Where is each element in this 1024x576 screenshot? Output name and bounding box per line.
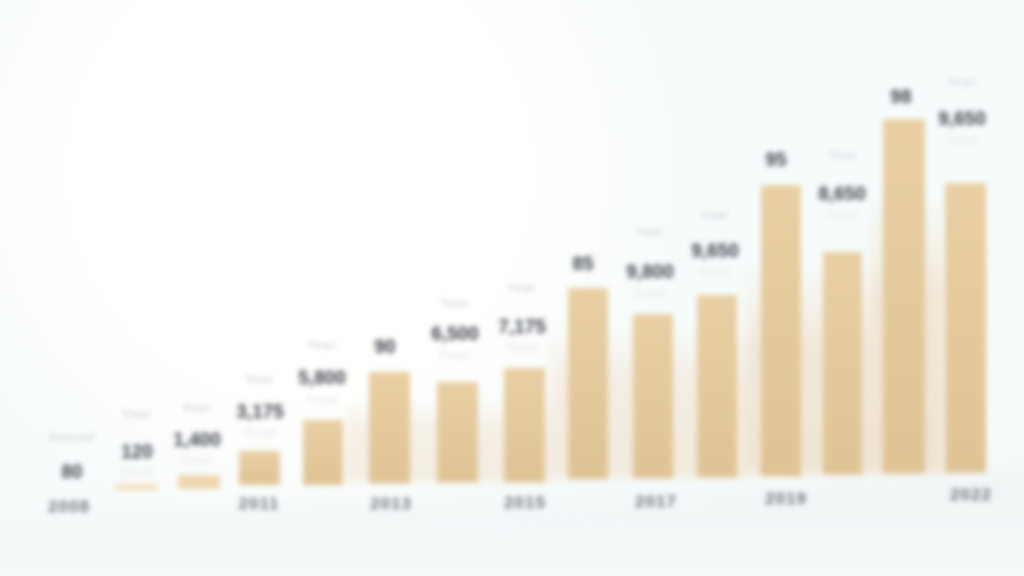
bar 13 [823, 252, 862, 474]
bar 7 [437, 382, 478, 482]
bar 6 [369, 372, 410, 483]
value labels: 98 [890, 87, 912, 108]
axis labels: 2019 [765, 489, 807, 508]
value labels: 6,500 [431, 324, 479, 345]
value labels: 95 [765, 150, 787, 171]
bar 12 [761, 185, 801, 476]
value labels: Year [947, 75, 977, 89]
bar 10 [633, 314, 673, 478]
value labels: Year [507, 281, 537, 295]
value labels: Total [946, 133, 978, 147]
value labels: Total [439, 348, 471, 362]
value labels: Year [122, 407, 152, 421]
bar chart [115, 119, 986, 491]
value labels: Year [635, 225, 665, 239]
value labels: 7,175 [498, 317, 546, 338]
value labels: Total [634, 286, 666, 300]
axis labels: 2013 [370, 494, 412, 513]
axis labels: 2008 [48, 497, 90, 516]
bar 11 [697, 295, 737, 477]
bar 4 [239, 451, 280, 485]
bar 14 [883, 119, 925, 473]
value labels: Total [244, 426, 276, 440]
bar 2 [115, 483, 158, 491]
value labels: Total [181, 453, 213, 467]
value labels: Year [307, 338, 337, 352]
value labels [49, 75, 986, 483]
value labels: 5,800 [298, 368, 346, 389]
value labels: 85 [572, 254, 594, 275]
bar 15 [945, 183, 986, 473]
value labels: Total [506, 341, 538, 355]
value labels: Year [440, 296, 470, 310]
value labels: 1,400 [173, 430, 221, 451]
bar 5 [303, 420, 343, 485]
bar 8 [504, 368, 545, 482]
value labels: Year [245, 372, 275, 386]
value labels: Total [826, 208, 858, 222]
bar 9 [568, 288, 608, 479]
value labels: 90 [374, 337, 396, 358]
value labels: Year [182, 401, 212, 415]
value labels: Annual [49, 430, 95, 444]
value labels: Year [700, 208, 730, 222]
bar shadows [345, 200, 945, 482]
bar 3 [178, 475, 220, 489]
value labels: 9,650 [691, 241, 739, 262]
value labels: Year [828, 148, 858, 162]
value labels: 3,175 [236, 402, 284, 423]
value labels: 9,650 [938, 109, 986, 130]
value labels: 120 [121, 442, 153, 463]
axis labels: 2011 [239, 494, 279, 513]
value labels: Total [306, 393, 338, 407]
value labels: Total [121, 465, 153, 479]
value labels: 8,650 [818, 184, 866, 205]
axis labels: 2022 [950, 485, 992, 504]
axis labels [48, 485, 992, 516]
value labels: 9,800 [626, 262, 674, 283]
axis labels: 2015 [504, 493, 546, 512]
value labels: 80 [61, 462, 83, 483]
axis labels: 2017 [635, 492, 677, 511]
value labels: Total [699, 265, 731, 279]
